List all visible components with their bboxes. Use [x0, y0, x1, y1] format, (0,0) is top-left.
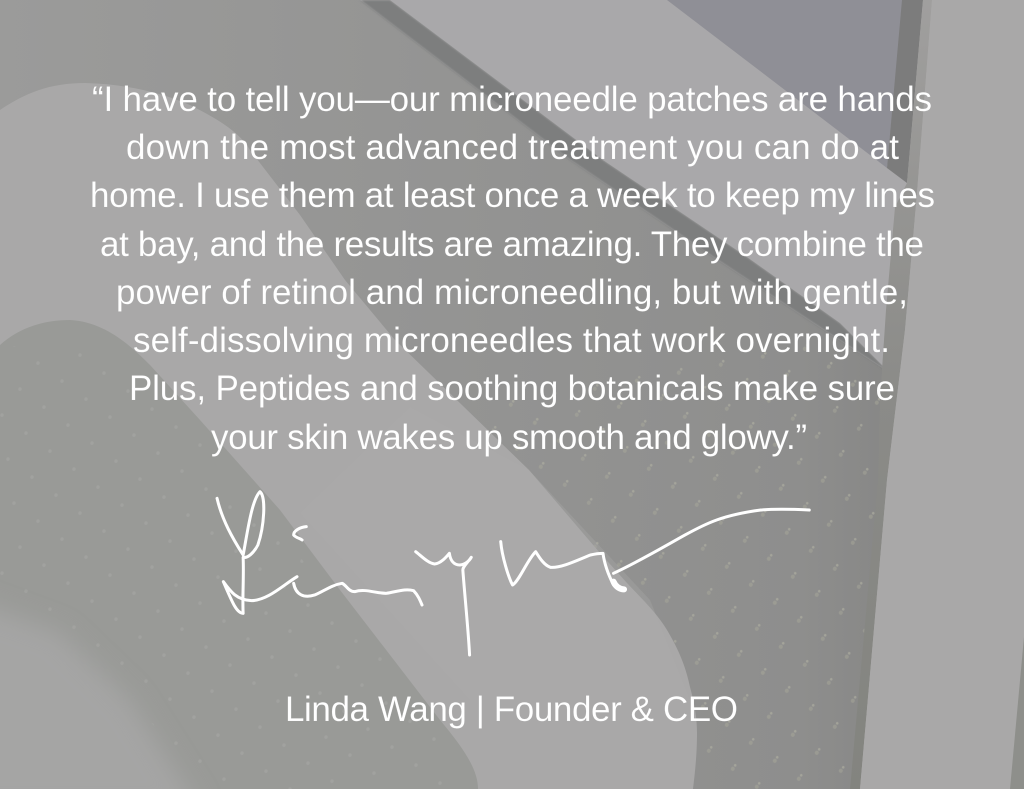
quote text: Plus, Peptides and soothing botanicals make sure — [129, 369, 895, 408]
vertical panel edge strip — [850, 0, 932, 789]
quote text: self-dissolving microneedles that work overnight. — [133, 321, 890, 360]
light diagonal band — [390, 0, 907, 373]
quote text: your skin wakes up smooth and glowy.” — [211, 418, 807, 457]
right paper panel — [860, 0, 1024, 789]
dark diagonal edge stripe — [360, 0, 890, 373]
attribution: Linda Wang | Founder & CEO — [285, 690, 738, 729]
card crease — [300, 407, 690, 700]
quote text: power of retinol and microneedling, but with gentle, — [116, 273, 908, 312]
needle dots on dark panel — [480, 340, 885, 789]
quote text: at bay, and the results are amazing. They combine the — [100, 225, 924, 264]
quote text: “I have to tell you—our microneedle patches are hands — [92, 80, 932, 119]
lower-left grey rounded patch — [0, 320, 478, 789]
lower-right corner strip — [1010, 637, 1024, 789]
quote text: down the most advanced treatment you can do at — [126, 128, 899, 167]
dark vertical strip, top right — [887, 0, 923, 183]
signature — [217, 492, 809, 655]
light rounded card — [0, 83, 697, 789]
pale inner area of patch — [0, 600, 200, 789]
quote text — [90, 80, 935, 457]
needle dots on grey patch — [0, 340, 470, 789]
blue-grey background area — [667, 0, 903, 168]
quote text: home. I use them at least once a week to keep my lines — [90, 176, 935, 215]
